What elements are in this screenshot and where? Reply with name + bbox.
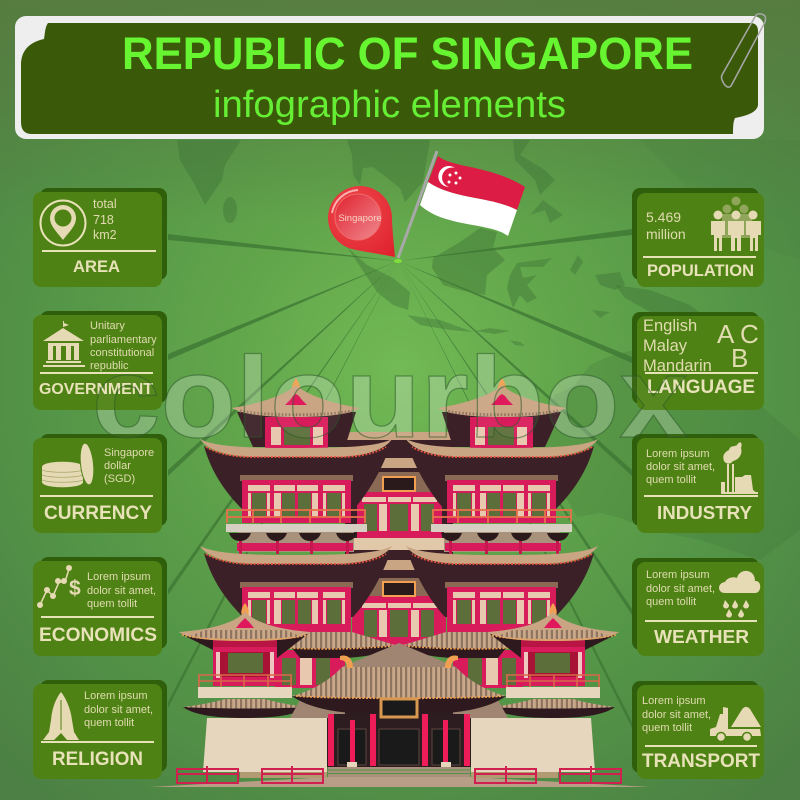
location dot [394, 259, 402, 263]
heading: currency: CURRENCY [44, 503, 152, 524]
text block: industry: quem tollit [646, 474, 696, 486]
text block: religion: Lorem ipsum [84, 690, 148, 702]
text block: weather: dolor sit amet, [646, 583, 715, 595]
panel: area [33, 188, 167, 287]
panel: transport [632, 681, 764, 779]
text block: weather: quem tollit [646, 596, 696, 608]
panel shadow [40, 557, 167, 649]
icon: factory [721, 442, 758, 494]
temple steps [328, 767, 470, 777]
text block: industry: Lorem ipsum [646, 448, 710, 460]
temple centre column [345, 432, 453, 646]
icon: letters: A [717, 319, 735, 349]
text block: population: 5.469 [646, 209, 681, 225]
text block: area: total [93, 197, 117, 211]
panel: religion [33, 680, 167, 779]
panel: language [632, 312, 764, 410]
flag pole [398, 151, 437, 258]
panel shadow [632, 558, 759, 650]
text block: transport: dolor sit amet, [642, 709, 711, 721]
temple [150, 378, 650, 787]
map pin: Singapore: Singapore [338, 213, 382, 224]
flag red stripe [428, 156, 525, 210]
panel: population [632, 188, 764, 287]
watermark fill: colourbox [92, 334, 688, 462]
subtitle: infographic elements [213, 84, 566, 126]
icon: location pin [40, 200, 86, 246]
heading: religion: RELIGION [52, 749, 143, 770]
heading: area: AREA [73, 257, 120, 276]
text block: language: Mandarin [643, 357, 712, 375]
text block: transport: quem tollit [642, 722, 692, 734]
title: REPUBLIC OF SINGAPORE [122, 28, 693, 79]
banner dark panel [21, 23, 758, 134]
heading: government: GOVERNMENT [39, 381, 153, 398]
text block: language: Malay [643, 337, 688, 355]
panel body [637, 562, 764, 656]
text block: government: parliamentary [90, 334, 157, 346]
panel body [33, 315, 162, 410]
text block: weather: Lorem ipsum [646, 569, 710, 581]
text block: government: Unitary [90, 320, 125, 332]
flag white stripe [420, 182, 517, 236]
panel shadow [40, 311, 167, 403]
text block: economics: quem tollit [87, 598, 137, 610]
icon: government building [43, 321, 85, 367]
text block: economics: dolor sit amet, [87, 585, 156, 597]
panel body [637, 193, 764, 287]
panel body [33, 192, 162, 287]
map pin: Singapore [328, 186, 395, 257]
text block: currency: dollar [104, 460, 131, 472]
icon: cloud and rain [719, 571, 760, 618]
text block: currency: (SGD) [104, 473, 135, 485]
watermark outline: colourbox [92, 334, 688, 462]
heading: economics: ECONOMICS [39, 625, 157, 646]
text block: government: constitutional [90, 347, 154, 359]
panel: weather [632, 558, 764, 656]
heading: industry: INDUSTRY [657, 502, 753, 523]
text block: industry: dolor sit amet, [646, 461, 715, 473]
text block: population: million [646, 226, 686, 242]
text block: language: English [643, 317, 697, 335]
panel: currency [33, 434, 167, 533]
banner [15, 14, 766, 139]
panel body [33, 684, 162, 779]
text block: government: republic [90, 360, 129, 372]
text block: economics: Lorem ipsum [87, 571, 151, 583]
icon: letters: B [731, 343, 748, 373]
panel shadow [632, 188, 759, 280]
panel: industry [632, 434, 764, 533]
flag crescent and stars [438, 166, 462, 187]
text block: transport: Lorem ipsum [642, 695, 706, 707]
icon: coins [42, 442, 96, 487]
text block: religion: quem tollit [84, 717, 134, 729]
heading: transport: TRANSPORT [642, 751, 760, 772]
icon: praying hands [43, 692, 79, 740]
heading: population: POPULATION [647, 262, 754, 280]
panel body [637, 438, 764, 533]
temple left towers [200, 378, 392, 688]
panel: government [33, 311, 167, 410]
panel body [33, 438, 162, 533]
heading: language: LANGUAGE [647, 377, 755, 398]
temple left lower tower [177, 603, 395, 783]
panel shadow [40, 434, 167, 526]
panel shadow [40, 188, 167, 280]
text block: religion: dolor sit amet, [84, 704, 153, 716]
icon: paperclip [722, 14, 766, 87]
heading: weather: WEATHER [654, 626, 749, 647]
world map [177, 140, 800, 560]
banner paper [15, 16, 764, 139]
icon: dump truck [710, 707, 761, 742]
connector lines [168, 229, 632, 728]
panel shadow [632, 681, 759, 773]
icon: people [711, 196, 761, 251]
panel body [33, 561, 162, 656]
panel: economics [33, 557, 167, 656]
temple main roof [292, 643, 506, 717]
icon: letters: C [740, 319, 759, 349]
icon: economics chart: $ [69, 577, 81, 600]
ground [150, 777, 650, 787]
panel shadow [40, 680, 167, 772]
temple right lower tower [403, 603, 621, 783]
temple base centre [327, 700, 471, 767]
text block: area: km2 [93, 228, 117, 242]
panel body [637, 685, 764, 779]
temple right towers [406, 378, 598, 688]
flag of Singapore [398, 151, 525, 258]
text block: area: 718 [93, 213, 114, 227]
text block: currency: Singapore [104, 447, 154, 459]
panel shadow [632, 312, 759, 404]
panel body [637, 316, 764, 410]
panel shadow [632, 434, 759, 526]
temple entrance [328, 714, 470, 767]
